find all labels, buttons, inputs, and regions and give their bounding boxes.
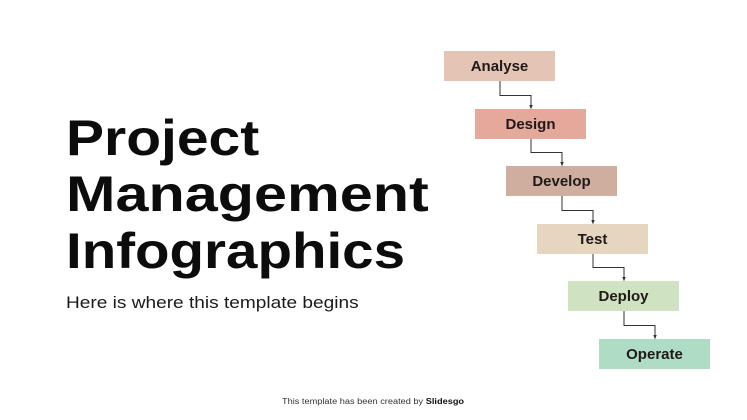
step: Analyse bbox=[444, 51, 555, 81]
arrow: Analyse to Design bbox=[500, 81, 532, 108]
step: Develop: Develop bbox=[532, 173, 591, 190]
step: Operate bbox=[599, 339, 710, 369]
step: Design bbox=[475, 109, 586, 139]
step: Operate: Operate bbox=[626, 346, 683, 363]
title: Management bbox=[66, 166, 429, 222]
step: Deploy: Deploy bbox=[598, 288, 648, 305]
title: Project bbox=[66, 110, 259, 166]
arrow: Deploy to Operate bbox=[624, 311, 656, 338]
step: Test: Test bbox=[578, 231, 607, 248]
step: Develop bbox=[506, 166, 617, 196]
step: Deploy bbox=[568, 281, 679, 311]
arrow: Develop to Test bbox=[562, 196, 594, 223]
arrow: Test to Deploy bbox=[593, 254, 625, 280]
step: Test bbox=[537, 224, 648, 254]
title: Infographics bbox=[66, 223, 405, 279]
step: Design: Design bbox=[505, 116, 556, 133]
arrow: Design to Develop bbox=[531, 139, 563, 165]
subtitle: Here is where this template begins bbox=[66, 293, 359, 312]
title bbox=[66, 110, 429, 279]
step: Analyse: Analyse bbox=[471, 58, 528, 75]
footer credit: This template has been created by Slidesgo bbox=[282, 397, 464, 406]
